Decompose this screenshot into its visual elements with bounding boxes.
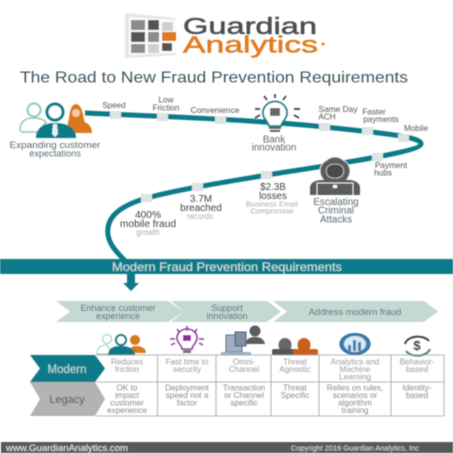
modern row text: Reduces <box>111 358 143 366</box>
title: The Road to New Fraud Prevention Requirements <box>20 70 408 86</box>
legacy row text: Threat <box>283 384 308 392</box>
modern row text: Omni- <box>233 358 255 366</box>
legacy row text: Identity- <box>402 384 432 392</box>
chevron: enhance customer experience: experience <box>96 311 140 321</box>
stat: 400 percent mobile fraud: 400% <box>135 210 161 221</box>
banner <box>0 259 453 274</box>
caption: business email compromise: Business Email <box>246 200 298 208</box>
icon: hooded attacker <box>310 157 360 195</box>
legacy row text: Specific <box>281 391 309 400</box>
logo <box>125 13 324 58</box>
logo: Analytics <box>183 32 318 58</box>
label: faster payments: Faster <box>362 108 386 116</box>
label: speed: Speed <box>102 101 126 110</box>
caption: growth: growth <box>136 228 160 237</box>
footer: www.GuardianAnalytics.com <box>5 443 128 453</box>
icon: behavior dollar <box>405 337 430 356</box>
label: bank innovation: innovation <box>252 142 296 154</box>
label: mobile: Mobile <box>404 124 429 133</box>
road <box>85 111 421 262</box>
legacy row text: algorithm <box>338 398 372 408</box>
legacy row text: specific <box>230 398 258 408</box>
logo: Guardian <box>183 13 317 39</box>
stat: 400 percent mobile fraud: mobile fraud <box>120 219 176 230</box>
modern row text: based <box>406 365 429 374</box>
legacy row text <box>107 384 432 415</box>
chevron: enhance customer experience <box>56 301 184 322</box>
label: same day ach: ACH <box>318 112 336 122</box>
label: expanding customer expectations: Expanding customer <box>10 140 100 150</box>
caption: records: records <box>187 212 213 221</box>
row header: modern <box>30 355 105 382</box>
stat: 2.3B losses: $2.3B <box>260 182 286 193</box>
caption: business email compromise: Compromise <box>250 206 294 216</box>
legacy row text: or Channel <box>224 391 264 400</box>
icon: threat hoods <box>272 338 318 355</box>
label: escalating criminal attacks: Attacks <box>320 214 352 226</box>
label: escalating criminal attacks: Criminal <box>318 206 354 216</box>
legacy row text: impact <box>115 391 140 400</box>
chevron: enhance customer experience: Enhance customer <box>80 303 156 313</box>
row header: modern: Modern <box>48 364 86 376</box>
label: escalating criminal attacks: Escalating <box>313 197 359 208</box>
label: payment hubs: hubs <box>374 168 392 178</box>
legacy row text: scenarios or <box>333 391 378 400</box>
modern row text: Agnostic <box>279 365 311 374</box>
legacy row text: experience <box>107 406 147 415</box>
label: low friction: Low <box>158 96 174 104</box>
chevron: support innovation: Support <box>211 303 243 313</box>
icon: omni-channel devices <box>221 326 265 355</box>
label: bank innovation: Bank <box>263 134 285 146</box>
legacy row text: factor <box>177 398 198 408</box>
modern row text <box>111 358 435 382</box>
footer: Copyright 2016 Guardian Analytics, Inc <box>291 446 420 452</box>
modern row text: Learning <box>339 372 371 382</box>
icon: analytics globe <box>340 334 370 354</box>
legacy row text: Relies on rules, <box>327 384 383 392</box>
comparison table grid <box>96 355 444 416</box>
legacy row text: based <box>406 391 429 400</box>
stat: 3.7M breached: breached <box>180 203 222 214</box>
chevron: address modern fraud: Address modern fraud <box>309 306 401 317</box>
label: payment hubs: Payment <box>375 161 408 170</box>
stat: 3.7M breached: 3.7M <box>190 194 212 205</box>
modern row text: Channel <box>229 365 259 374</box>
modern row text: Machine <box>340 365 371 374</box>
icon: bank innovation bulb <box>255 94 300 132</box>
legacy row text: speed not a <box>166 391 209 400</box>
stat: 2.3B losses: losses <box>259 191 287 202</box>
chevron: support innovation <box>171 301 281 322</box>
icon: behavior dollar: $ <box>413 338 421 353</box>
legacy row text: training <box>342 406 369 415</box>
row header: legacy <box>30 382 105 416</box>
arrow <box>123 274 139 291</box>
legacy row text: OK to <box>117 384 138 392</box>
banner: Modern Fraud Prevention Requirements <box>112 261 342 274</box>
legacy row text: customer <box>110 398 144 408</box>
modern row text: Analytics and <box>331 358 380 366</box>
modern row text: Fast time to <box>166 358 209 366</box>
chevron: support innovation: innovation <box>206 311 248 321</box>
legacy row text: Deployment <box>165 384 210 392</box>
row header: legacy: Legacy <box>49 394 85 406</box>
icon: customers <box>20 104 92 138</box>
label: expanding customer expectations: expectations <box>29 148 81 158</box>
modern row text: Threat <box>283 358 308 366</box>
modern row text: Behavior- <box>399 358 435 366</box>
modern row text: security <box>173 365 202 374</box>
legacy row text: Transaction <box>223 384 266 392</box>
label: convenience: Convenience <box>191 105 240 115</box>
label: faster payments: payments <box>363 115 399 124</box>
footer <box>1 442 453 453</box>
icon: customers small <box>97 334 146 355</box>
modern row text: friction <box>115 365 139 374</box>
label: same day ach: Same Day <box>318 105 358 114</box>
label: low friction: Friction <box>153 104 180 112</box>
chevron: address modern fraud <box>273 301 438 322</box>
icon: purple bulb <box>170 326 204 353</box>
